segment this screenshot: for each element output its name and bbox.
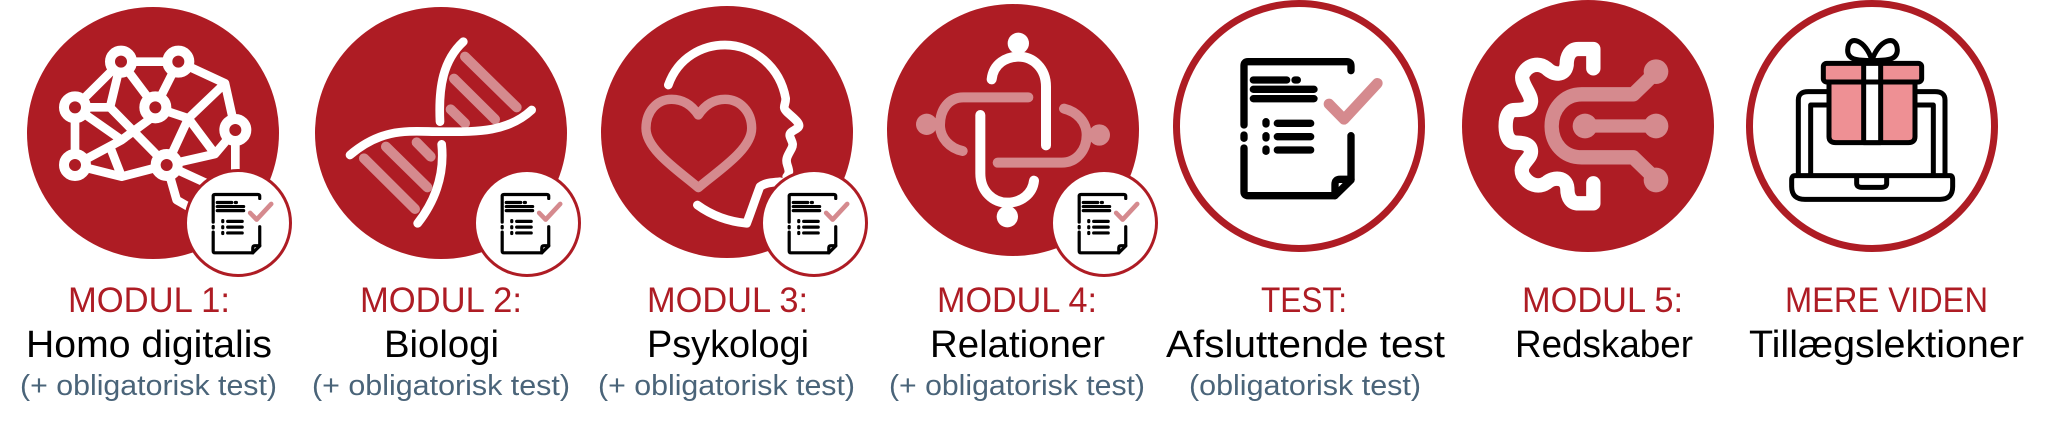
- badge: test document: [762, 170, 866, 276]
- title: Redskaber: Redskaber: [1515, 324, 1693, 366]
- icon: DNA helix: [315, 7, 567, 259]
- label: MODUL 3: MODUL 3:: [647, 281, 808, 320]
- icon: laptop with gift: [1750, 4, 1994, 248]
- icon: brain network: [27, 7, 279, 259]
- label: MODUL 2: MODUL 2:: [360, 281, 522, 320]
- module 4: Relationer: [887, 4, 1156, 402]
- label: MODUL 5: MODUL 5:: [1522, 281, 1683, 320]
- more knowledge: extra lessons: [1749, 4, 2024, 366]
- icon: interlinked people: [887, 4, 1139, 256]
- title: Psykologi: Psykologi: [647, 324, 809, 366]
- label: MODUL 1: MODUL 1:: [68, 281, 230, 320]
- icon: test document in outlined circle: [1176, 4, 1422, 248]
- title: Afsluttende test: Afsluttende test: [1166, 324, 1445, 366]
- label: MERE VIDEN: MERE VIDEN: [1785, 281, 1988, 320]
- title: Tillægslektioner: Tillægslektioner: [1749, 324, 2024, 366]
- note: obligatory test: (+ obligatorisk test): [20, 370, 277, 402]
- note: obligatory test: (obligatorisk test): [1189, 370, 1421, 402]
- note: obligatory test: (+ obligatorisk test): [312, 370, 570, 402]
- module 2: Biologi: [312, 7, 580, 402]
- title: Homo digitalis: Homo digitalis: [26, 324, 272, 366]
- icon: head with heart: [601, 6, 853, 258]
- badge: test document: [1052, 170, 1156, 276]
- final test: [1166, 4, 1445, 402]
- module 1: Homo digitalis: [20, 7, 290, 402]
- label: MODUL 4: MODUL 4:: [937, 281, 1097, 320]
- note: obligatory test: (+ obligatorisk test): [889, 370, 1145, 402]
- module 3: Psykologi: [598, 6, 866, 402]
- title: Relationer: Relationer: [930, 324, 1105, 366]
- title: Biologi: Biologi: [384, 324, 499, 366]
- module 5: Redskaber: [1462, 0, 1714, 366]
- note: obligatory test: (+ obligatorisk test): [598, 370, 855, 402]
- label: TEST: TEST:: [1261, 281, 1347, 320]
- icon: gear with circuit: [1462, 0, 1714, 252]
- badge: test document: [474, 170, 580, 276]
- badge: test document: [186, 170, 290, 276]
